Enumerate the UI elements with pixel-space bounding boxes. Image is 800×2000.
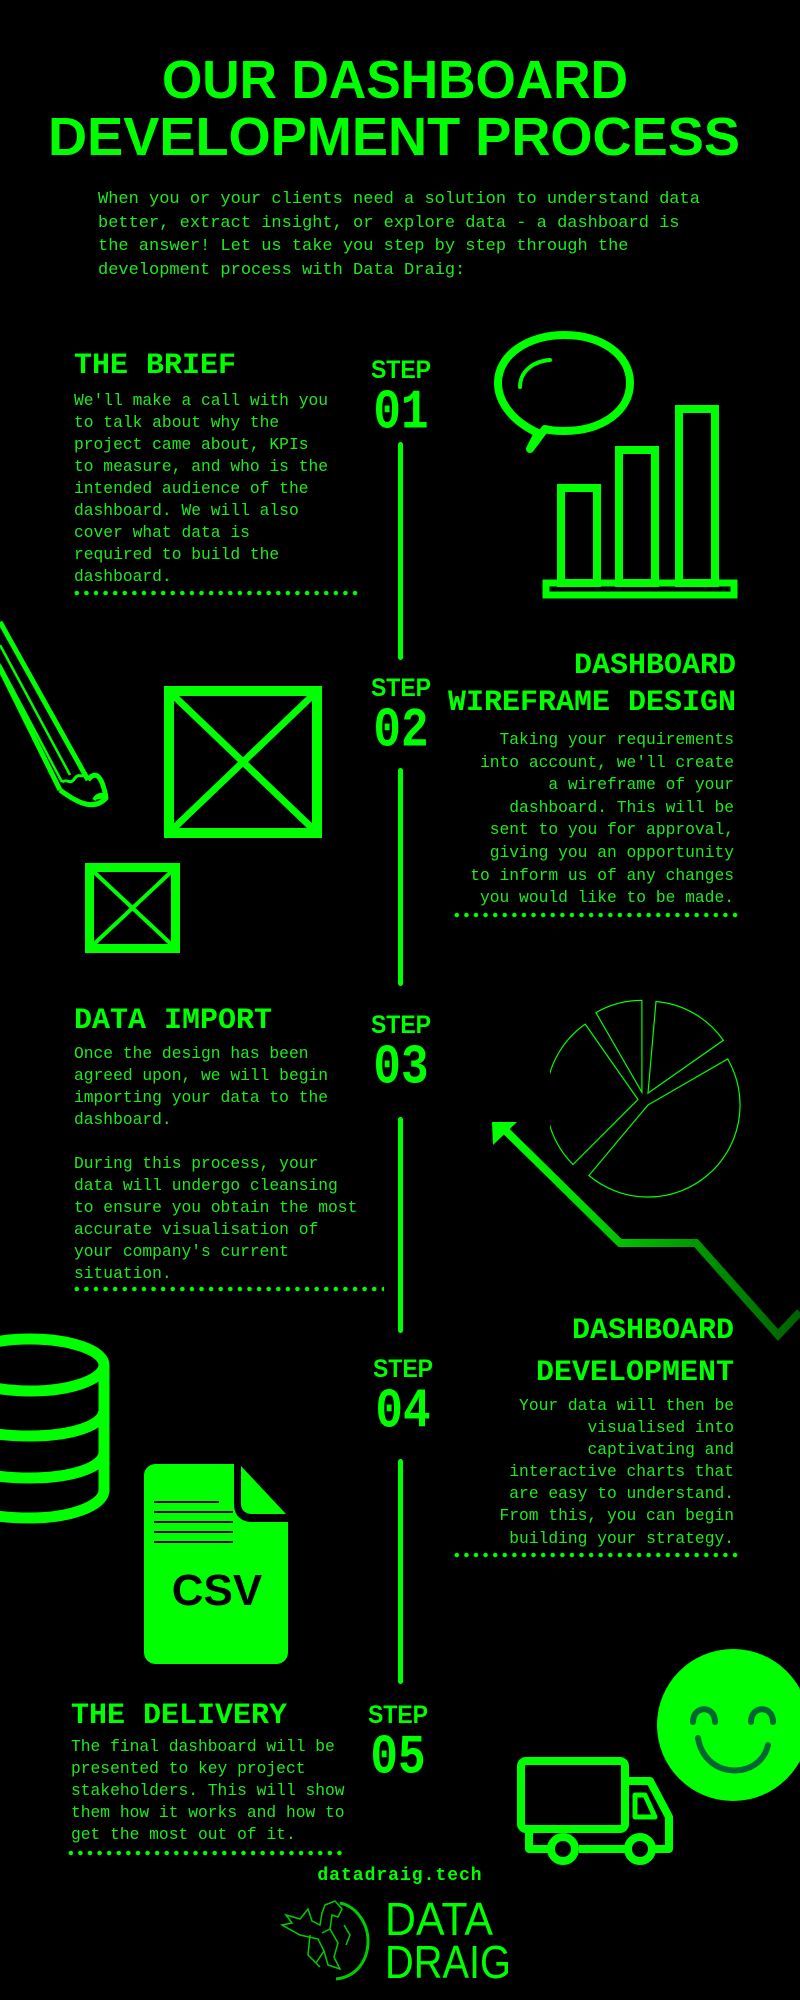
step 05 panel (68, 1699, 428, 1856)
arrow: trend (492, 1122, 800, 1341)
title (48, 50, 740, 167)
text: delivery body: The final dashboard will be presented to key project stakeholders. This will show them how it works and how to get the most out of it. (71, 1737, 345, 1844)
text: development body: Your data will then be visualised into captivating and interactive charts that are easy to understand. From this, you can begin building your strategy. (500, 1396, 734, 1548)
heading: wireframe design: DASHBOARD (574, 649, 736, 683)
footer url: datadraig.tech (317, 1866, 483, 1886)
intro text: When you or your clients need a solution to understand data better, extract insight, or explore data - a dashboard is the answer! Let us take you step by step through the development process with Data Draig: (98, 190, 700, 280)
icon: dragon emblem (282, 1901, 368, 1979)
logo: DRAIG (385, 1936, 511, 1988)
step label 05 (368, 1700, 428, 1789)
step label 02: STEP (371, 673, 431, 701)
icon: pencil (0, 620, 108, 808)
logo (280, 1895, 511, 1988)
heading: dashboard development: DEVELOPMENT (536, 1356, 734, 1390)
step label 02 (371, 673, 431, 762)
heading: the delivery: THE DELIVERY (71, 1699, 287, 1733)
heading: the brief: THE BRIEF (74, 349, 236, 383)
text: brief body: We'll make a call with you to talk about why the project came about, KPIs to measure, and who is the intended audience of the dashboard. We will also cover what data is required to build the dashboard. (74, 391, 328, 586)
step label 01: 01 (373, 382, 429, 444)
step label 05: 05 (370, 1727, 426, 1789)
icon: bar chart (542, 405, 738, 598)
icon: csv file (144, 1464, 288, 1664)
step label 04 (373, 1354, 433, 1443)
text: data import body: Once the design has been agreed upon, we will begin importing your data to the dashboard. During this process, your data will undergo cleansing to ensure you obtain the most accurate visualisation of your company's current situation. (74, 1044, 357, 1283)
icon: smiley (657, 1649, 800, 1801)
step label 04: STEP (373, 1354, 433, 1382)
heading: wireframe design: WIREFRAME DESIGN (448, 686, 736, 720)
icon: csv file: CSV (172, 1566, 263, 1615)
step label 03: STEP (371, 1010, 431, 1038)
heading: dashboard development: DASHBOARD (572, 1314, 734, 1348)
icon: pie chart (550, 1000, 741, 1198)
step 01 panel (74, 349, 431, 596)
icon: wireframe small (85, 863, 180, 953)
title: OUR DASHBOARD (162, 50, 628, 110)
icon: truck (517, 1757, 673, 1865)
heading: wireframe design (448, 649, 736, 720)
step label 02: 02 (373, 700, 429, 762)
icon: database (0, 1334, 110, 1524)
step label 03: 03 (373, 1037, 429, 1099)
step 04 panel (373, 1314, 738, 1558)
step label 04: 04 (375, 1381, 431, 1443)
step label 03 (371, 1010, 431, 1099)
step label 01 (371, 355, 431, 444)
step label 01: STEP (371, 355, 431, 383)
heading: dashboard development (536, 1314, 734, 1390)
icon: wireframe large (164, 686, 322, 838)
step 03 panel (74, 1004, 431, 1292)
title: DEVELOPMENT PROCESS (48, 107, 740, 167)
step label 05: STEP (368, 1700, 428, 1728)
heading: data import: DATA IMPORT (74, 1004, 272, 1038)
step 02 panel (371, 649, 738, 918)
icon: speech bubble (494, 331, 634, 453)
text: wireframe body: Taking your requirements into account, we'll create a wireframe of your dashboard. This will be sent to you for approval, giving you an opportunity to inform us of any changes you would like to be made. (470, 730, 734, 907)
